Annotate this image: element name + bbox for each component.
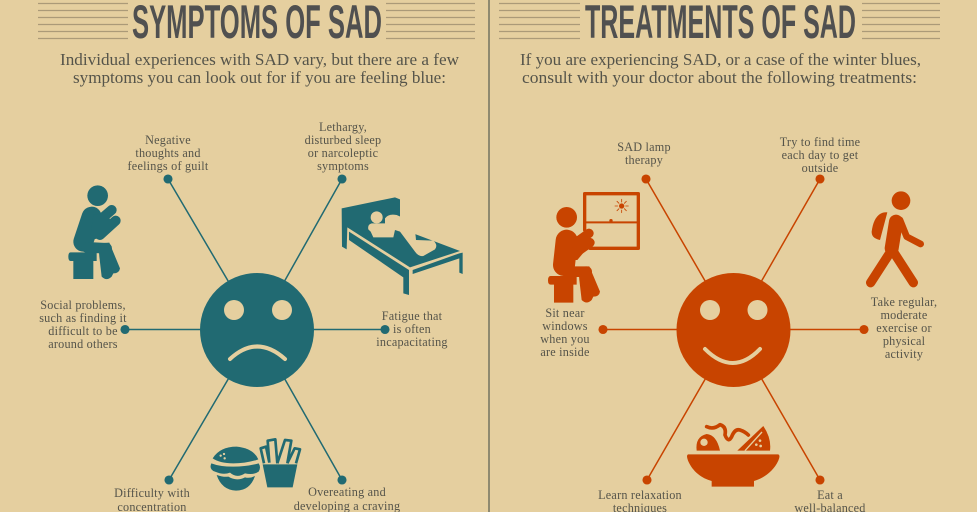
labels: treatments: Learn relaxation: [598, 488, 682, 502]
labels: symptoms: feelings of guilt: [128, 159, 209, 173]
labels: treatments: Try to find time: [780, 135, 860, 149]
sad face: [200, 273, 314, 387]
labels: treatments: Take regular,: [871, 295, 937, 309]
intro text: treatments: [520, 50, 921, 87]
icon: burger and fries: [211, 439, 300, 491]
labels: treatments: therapy: [625, 153, 664, 167]
labels: treatments: activity: [885, 347, 924, 361]
labels: symptoms: Overeating and: [308, 485, 386, 499]
panel: treatments of SAD: [520, 0, 937, 512]
labels: symptoms: [39, 120, 448, 512]
labels: treatments: each day to get: [782, 148, 859, 162]
labels: treatments: when you: [540, 332, 590, 346]
labels: treatments: [540, 135, 937, 512]
labels: treatments: Eat a: [817, 488, 843, 502]
icon: person sitting near window: [548, 194, 638, 303]
labels: symptoms: Social problems,: [40, 298, 126, 312]
labels: symptoms: disturbed sleep: [305, 133, 381, 147]
labels: treatments: moderate: [880, 308, 928, 322]
labels: symptoms: Difficulty with: [114, 486, 190, 500]
intro text: symptoms: [60, 50, 460, 87]
labels: treatments: Sit near: [545, 306, 585, 320]
intro text: treatments: If you are experiencing SAD, or a case of the winter blues,: [520, 50, 921, 69]
labels: treatments: physical: [883, 334, 926, 348]
labels: symptoms: difficult to be: [48, 324, 118, 338]
intro text: treatments: consult with your doctor about the following treatments:: [522, 68, 917, 87]
spokes: symptoms: [121, 175, 389, 484]
labels: symptoms: thoughts and: [135, 146, 201, 160]
spokes: treatments: [599, 175, 868, 484]
icon: walking person with backpack: [871, 191, 921, 283]
labels: treatments: SAD lamp: [617, 140, 671, 154]
happy face: [676, 273, 790, 387]
labels: treatments: outside: [802, 161, 838, 175]
intro text: symptoms: Individual experiences with SAD vary, but there are a few: [60, 50, 460, 69]
labels: symptoms: such as finding it: [39, 311, 127, 325]
panel: symptoms of SAD: [39, 0, 463, 512]
labels: symptoms: incapacitating: [376, 335, 448, 349]
icon: salad bowl: [687, 425, 779, 487]
labels: treatments: exercise or: [876, 321, 932, 335]
labels: symptoms: symptoms: [317, 159, 369, 173]
labels: symptoms: Lethargy,: [319, 120, 367, 134]
icon: person lying on bed: [342, 197, 463, 295]
labels: symptoms: around others: [48, 337, 118, 351]
labels: symptoms: or narcoleptic: [308, 146, 379, 160]
labels: treatments: are inside: [540, 345, 590, 359]
labels: symptoms: Fatigue that: [382, 309, 443, 323]
icon: seated thinking person: [68, 185, 120, 279]
intro text: symptoms: symptoms you can look out for if you are feeling blue:: [73, 68, 446, 87]
labels: symptoms: Negative: [145, 133, 191, 147]
labels: treatments: windows: [542, 319, 588, 333]
labels: symptoms: is often: [393, 322, 431, 336]
